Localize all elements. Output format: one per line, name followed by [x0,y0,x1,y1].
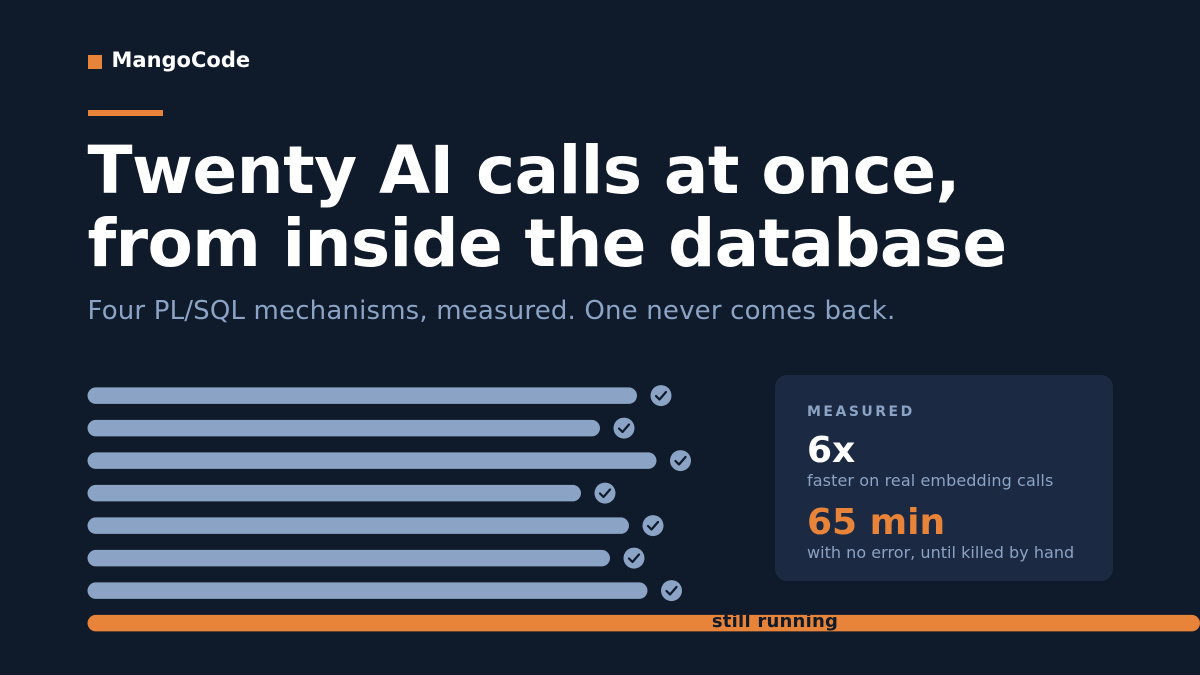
completed bar 1 [88,387,637,404]
completed bar 6 [88,550,610,566]
brand logo [88,48,250,72]
completed bar 3 [88,452,656,469]
stat: 65 min: 65 min [807,502,945,543]
stat: 6x: 6x [807,430,855,471]
panel heading: MEASURED [807,404,915,420]
accent rule [88,110,162,116]
still running bar [88,614,1200,632]
brand name: MangoCode [112,48,250,72]
bar chart: parallel calls [88,385,1200,632]
icon: check 1 [650,385,672,406]
icon: check 5 [642,515,664,536]
icon: check 2 [614,418,634,439]
title: Twenty AI calls at once, [88,132,960,209]
completed bar 5 [88,517,629,534]
title: from inside the database [88,205,1006,282]
completed bar 4 [88,485,581,501]
icon: check 7 [661,580,682,601]
completed bar 2 [88,420,600,436]
icon: check 3 [670,450,691,471]
icon: check 4 [594,483,616,504]
panel: measured stats [775,375,1112,581]
completed bar 7 [88,582,648,599]
stat caption: 65 min: with no error, until killed by hand [807,543,1074,562]
stat caption: 6x: faster on real embedding calls [807,471,1053,490]
icon: check 6 [624,548,644,569]
title [88,132,1006,282]
bar label: still running [712,611,838,632]
icon: orange square [88,55,102,69]
subtitle: Four PL/SQL mechanisms, measured. One never comes back. [88,296,895,326]
